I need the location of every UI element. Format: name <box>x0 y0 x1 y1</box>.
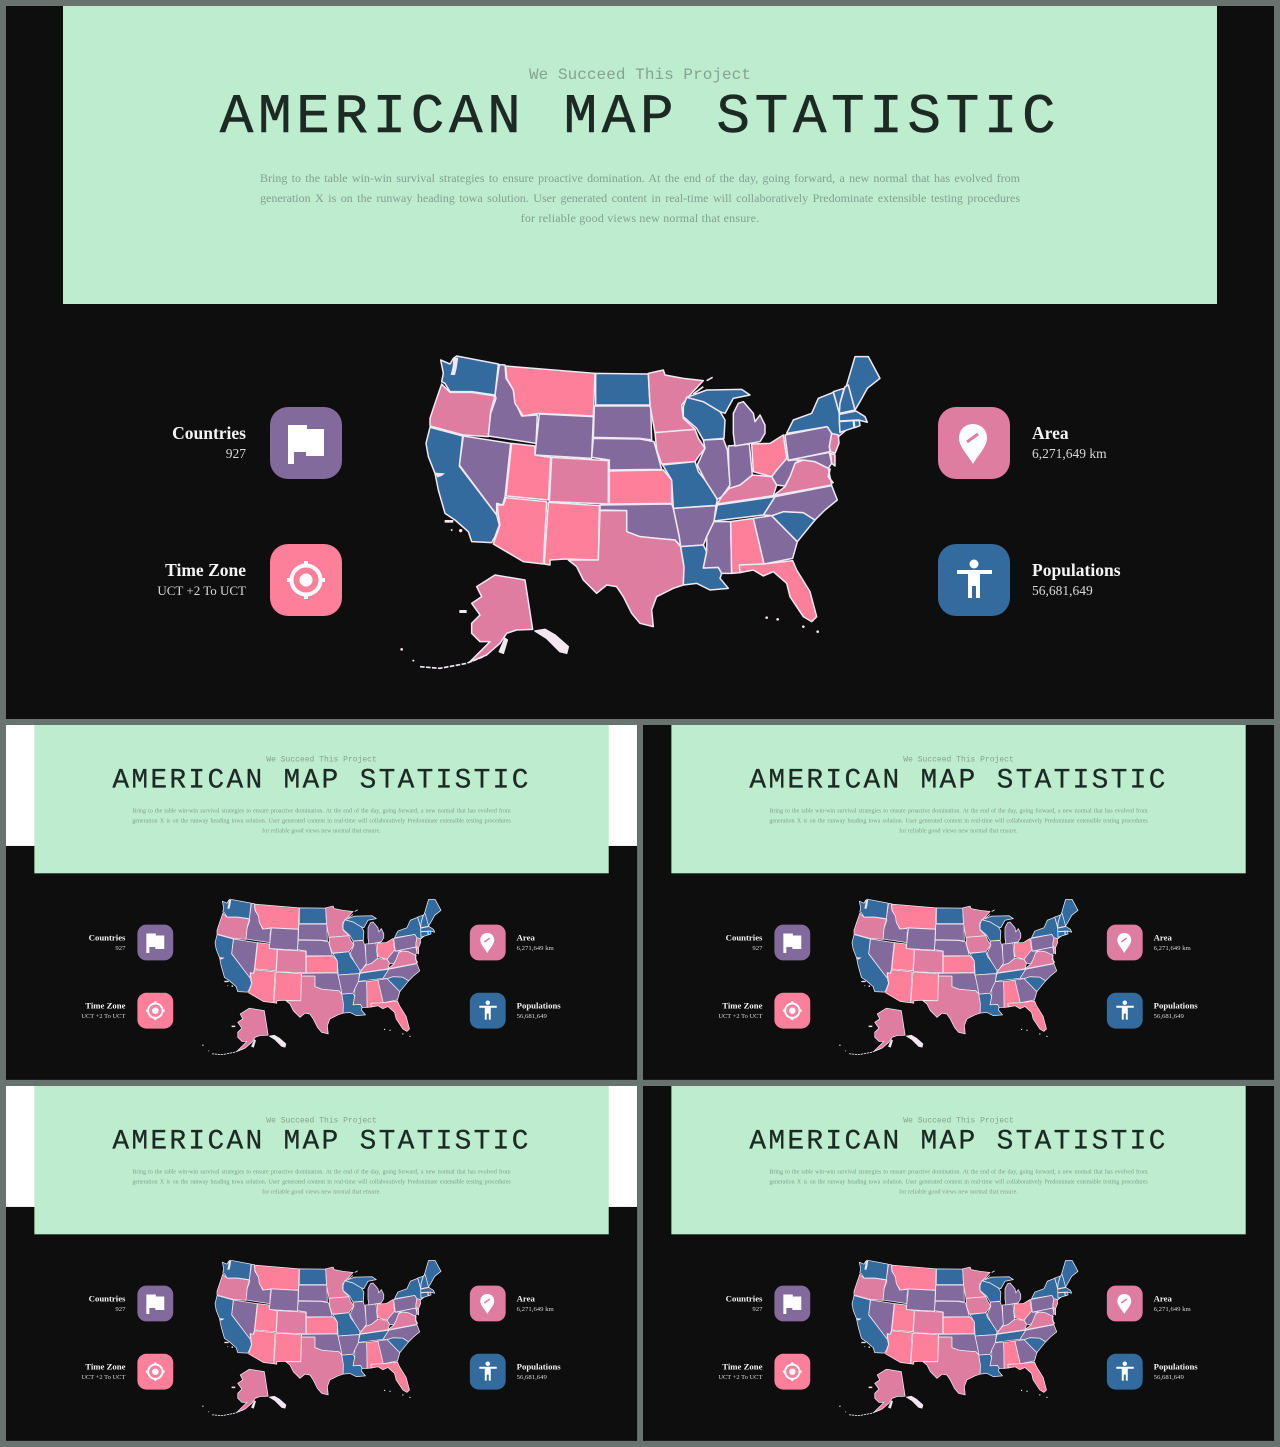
icon: map pin <box>938 407 1010 479</box>
icon: target <box>137 993 173 1029</box>
icon: person <box>1107 993 1143 1029</box>
panel: thumbnail slide bottom right <box>643 1086 1274 1441</box>
eyebrow text: We Succeed This Project <box>529 66 751 84</box>
stat: populations: 56,681,649 <box>517 1373 547 1381</box>
title: AMERICAN MAP STATISTIC <box>220 85 1060 149</box>
stat: countries <box>726 1294 762 1312</box>
icon: target <box>774 1354 810 1390</box>
stat: area <box>1154 933 1191 952</box>
stat: area: Area <box>517 1294 535 1303</box>
header band: for reliable good views new normal that ensure. <box>899 1188 1018 1195</box>
stat: area: Area <box>1154 933 1172 942</box>
stat: time zone: UCT +2 To UCT <box>81 1373 125 1381</box>
stat: area: Area <box>1032 423 1069 443</box>
description text: generation X is on the runway heading towa solution. User generated content in real-time will collaboratively Predominate extensible testing procedures <box>260 191 1020 205</box>
header band <box>671 1086 1246 1234</box>
icon: flag <box>270 407 342 479</box>
stat: countries: 927 <box>115 1305 125 1312</box>
header band <box>34 1086 609 1234</box>
description text: Bring to the table win-win survival strategies to ensure proactive domination. At the end of the day, going forward, a new normal that has evolved from <box>260 171 1020 185</box>
stat: countries: Countries <box>726 933 762 942</box>
header band: AMERICAN MAP STATISTIC <box>112 764 531 796</box>
stat: countries: 927 <box>226 446 246 461</box>
stat: countries: 927 <box>752 944 762 951</box>
USA map thumbnail <box>202 898 442 1055</box>
stat: time zone: Time Zone <box>165 560 246 580</box>
stat: area: 6,271,649 km <box>1154 1305 1191 1312</box>
icon: person <box>938 544 1010 616</box>
stat: countries: Countries <box>172 423 246 443</box>
stat: populations: Populations <box>1032 560 1120 580</box>
stat: populations: 56,681,649 <box>1032 583 1093 598</box>
header band: AMERICAN MAP STATISTIC <box>749 764 1168 796</box>
header band: for reliable good views new normal that ensure. <box>262 1188 381 1195</box>
header band: Bring to the table win-win survival strategies to ensure proactive domination. At the end of the day, going forward, a new normal that has evolved from <box>132 807 511 814</box>
stat: time zone: Time Zone <box>85 1362 125 1372</box>
stat: time zone <box>81 1362 126 1381</box>
icon: person <box>470 993 506 1029</box>
icon: flag <box>137 1286 173 1321</box>
stat: populations <box>1154 1001 1198 1020</box>
stat: countries <box>89 933 126 951</box>
header band: We Succeed This Project <box>266 1116 377 1125</box>
stat: countries <box>89 1294 126 1312</box>
panel: thumbnail slide top right <box>643 725 1274 1080</box>
stat: countries: Countries <box>89 933 125 942</box>
stat: populations <box>1154 1362 1198 1381</box>
stat: area <box>1154 1294 1191 1312</box>
icon: map pin <box>470 1286 506 1321</box>
icon: flag <box>774 1286 810 1321</box>
stat: populations: Populations <box>1154 1362 1198 1372</box>
header band: generation X is on the runway heading towa solution. User generated content in real-time will collaboratively Predominate extensible testing procedures <box>769 1178 1148 1185</box>
USA state map <box>400 355 881 670</box>
stat: time zone <box>81 1001 126 1020</box>
stat: populations: 56,681,649 <box>517 1012 547 1020</box>
stat: area <box>516 1294 554 1312</box>
stat: time zone: Time Zone <box>85 1001 125 1011</box>
stat: time zone: UCT +2 To UCT <box>81 1012 125 1020</box>
stat: countries <box>172 423 246 461</box>
icon: flag <box>774 925 810 960</box>
icon: target <box>137 1354 173 1390</box>
description text <box>260 171 1020 225</box>
panel: thumbnail slide bottom left <box>6 1086 637 1441</box>
header band: generation X is on the runway heading towa solution. User generated content in real-time will collaboratively Predominate extensible testing procedures <box>132 1178 511 1185</box>
stat: area <box>1032 423 1107 461</box>
icon: map pin <box>1107 925 1143 960</box>
header band: We Succeed This Project <box>903 1116 1014 1125</box>
icon: map pin <box>470 925 506 960</box>
description text: for reliable good views new normal that ensure. <box>521 211 759 225</box>
stat: time zone: UCT +2 To UCT <box>718 1012 762 1020</box>
header band <box>671 725 1246 873</box>
stat: time zone <box>157 560 246 598</box>
stat: populations: Populations <box>517 1001 561 1011</box>
stat: time zone: Time Zone <box>722 1001 762 1011</box>
stat: populations: 56,681,649 <box>1154 1373 1184 1381</box>
panel: main slide <box>6 6 1274 719</box>
stat: populations <box>516 1001 561 1020</box>
header band: generation X is on the runway heading towa solution. User generated content in real-time will collaboratively Predominate extensible testing procedures <box>769 817 1148 824</box>
stat: area: Area <box>517 933 535 942</box>
stat: area: 6,271,649 km <box>517 944 554 951</box>
stat: area: 6,271,649 km <box>1032 446 1107 461</box>
stat: countries: Countries <box>89 1294 125 1303</box>
stat: area: Area <box>1154 1294 1172 1303</box>
panel: thumbnail slide top left <box>6 725 637 1080</box>
USA map thumbnail <box>839 898 1078 1055</box>
stat: area: 6,271,649 km <box>1154 944 1191 951</box>
header band: Bring to the table win-win survival strategies to ensure proactive domination. At the end of the day, going forward, a new normal that has evolved from <box>769 1168 1148 1175</box>
stat: populations <box>1032 560 1120 598</box>
stat: countries: 927 <box>115 944 125 951</box>
stat: area <box>516 933 554 952</box>
header band: for reliable good views new normal that ensure. <box>899 827 1018 834</box>
header band: AMERICAN MAP STATISTIC <box>749 1125 1168 1157</box>
header band: Bring to the table win-win survival strategies to ensure proactive domination. At the end of the day, going forward, a new normal that has evolved from <box>769 807 1148 814</box>
header band: We Succeed This Project <box>903 755 1014 764</box>
stat: countries: 927 <box>752 1305 762 1312</box>
stat: countries: Countries <box>726 1294 762 1303</box>
stat: area: 6,271,649 km <box>517 1305 554 1312</box>
icon: person <box>470 1354 506 1390</box>
stat: countries <box>726 933 762 951</box>
icon: map pin <box>1107 1286 1143 1321</box>
stat: populations: Populations <box>517 1362 561 1372</box>
USA map thumbnail <box>839 1260 1078 1416</box>
icon: target <box>270 544 342 616</box>
icon: person <box>1107 1354 1143 1390</box>
icon: target <box>774 993 810 1029</box>
stat: time zone: UCT +2 To UCT <box>157 583 246 598</box>
stat: time zone <box>718 1001 762 1020</box>
header band <box>34 725 609 873</box>
stat: time zone: Time Zone <box>722 1362 762 1372</box>
header band: Bring to the table win-win survival strategies to ensure proactive domination. At the end of the day, going forward, a new normal that has evolved from <box>132 1168 511 1175</box>
stat: populations: Populations <box>1154 1001 1198 1011</box>
header band: for reliable good views new normal that ensure. <box>262 827 381 834</box>
stat: populations: 56,681,649 <box>1154 1012 1184 1020</box>
header band: generation X is on the runway heading towa solution. User generated content in real-time will collaboratively Predominate extensible testing procedures <box>132 817 511 824</box>
header band <box>63 6 1217 304</box>
header band: AMERICAN MAP STATISTIC <box>112 1125 531 1157</box>
stat: time zone <box>718 1362 762 1381</box>
USA map thumbnail <box>202 1260 442 1416</box>
header band: We Succeed This Project <box>266 755 377 764</box>
stat: populations <box>516 1362 561 1381</box>
icon: flag <box>137 925 173 960</box>
stat: time zone: UCT +2 To UCT <box>718 1373 762 1381</box>
